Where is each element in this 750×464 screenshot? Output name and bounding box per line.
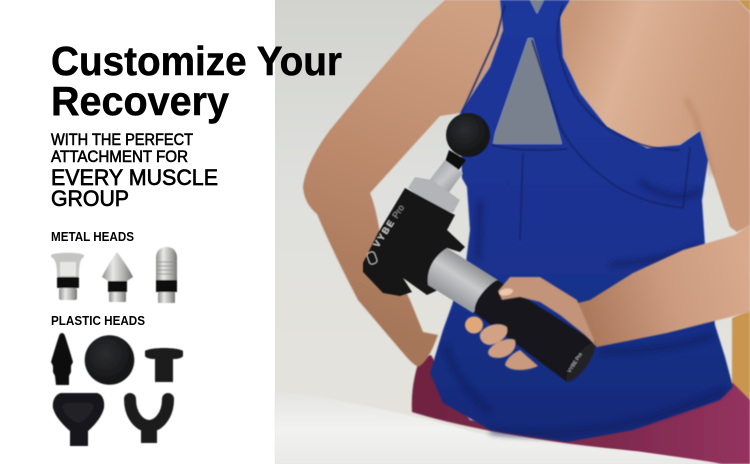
subtitle	[51, 131, 218, 211]
gun ball attachment	[446, 113, 490, 157]
heading: plastic heads: PLASTIC HEADS	[51, 313, 145, 328]
subtitle: ATTACHMENT FOR	[51, 148, 188, 166]
bed with white towel	[275, 393, 722, 464]
title: Customize Your	[51, 38, 342, 84]
black gun body	[363, 188, 465, 296]
subtitle: WITH THE PERFECT	[51, 131, 193, 149]
plastic heads group	[51, 333, 183, 446]
photo: woman using massage gun on her back	[275, 0, 750, 464]
subtitle: GROUP	[51, 186, 129, 211]
blue tank top	[430, 0, 733, 442]
silver collar	[408, 177, 460, 213]
fingers gripping handle	[465, 316, 538, 370]
plastic head: wide wedge	[53, 393, 104, 446]
black grip handle	[475, 280, 595, 382]
metal head: bullet	[156, 247, 177, 303]
left white panel	[0, 0, 275, 464]
metal head: flat flared	[51, 253, 84, 300]
grip end cap	[566, 342, 595, 382]
metal head: cone	[102, 252, 133, 302]
forearm to wrist	[570, 224, 750, 347]
plastic head: fork	[130, 399, 168, 426]
gun model label: Pro	[390, 203, 406, 220]
woman's bent left arm and shoulder	[303, 0, 503, 367]
thumb and palm over handle	[498, 277, 597, 347]
metal heads group	[51, 247, 177, 303]
maroon leggings	[412, 355, 750, 464]
tank top seams	[462, 5, 690, 240]
subtitle: EVERY MUSCLE	[51, 165, 218, 190]
tank top fold shadows	[445, 180, 725, 434]
wall background	[275, 0, 750, 464]
back and right arm skin	[560, 0, 750, 232]
heading: metal heads: METAL HEADS	[51, 229, 134, 244]
wedge inner panel	[63, 403, 93, 423]
fork stem	[141, 426, 157, 443]
thumb nail	[498, 287, 514, 297]
wooden furniture at right edge	[732, 0, 750, 400]
silver shaft	[428, 160, 463, 195]
plastic head: ball	[85, 335, 134, 385]
plastic head: flat T	[145, 348, 183, 382]
power button outline	[366, 251, 378, 265]
title	[51, 38, 342, 124]
massage gun	[363, 113, 595, 382]
silver barrel	[428, 248, 498, 313]
plastic head: bullet cone	[51, 333, 73, 385]
grey sports bra panel	[493, 0, 562, 144]
armpit crease shadow	[686, 98, 712, 175]
grip end cap label: VYBE Pro	[567, 352, 584, 374]
title: Recovery	[51, 78, 229, 124]
gun brand label: VYBE	[371, 218, 396, 249]
gun neck	[444, 150, 466, 171]
